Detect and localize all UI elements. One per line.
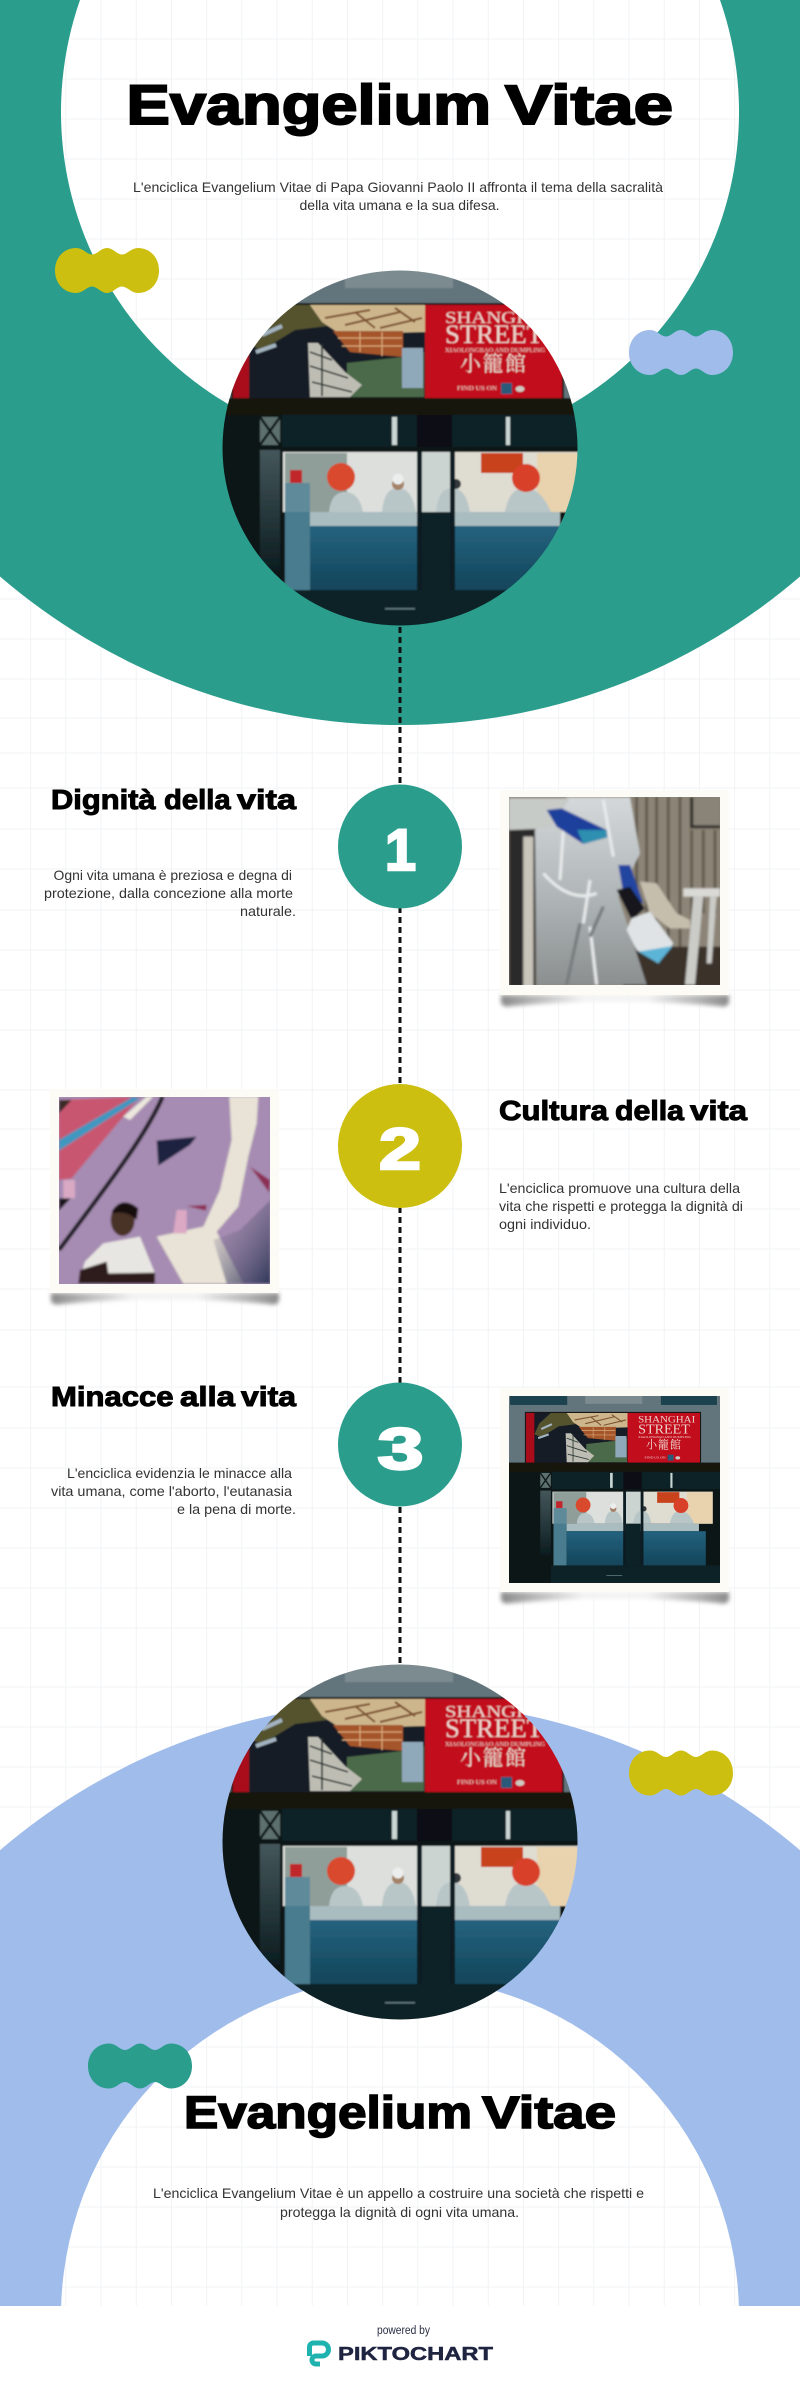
photo: top circle shop front: 小籠館	[460, 352, 526, 376]
closing title: Evangelium	[184, 2087, 472, 2138]
step 1	[44, 784, 729, 1007]
number circle 2	[338, 1084, 462, 1208]
number circle 2: 2	[379, 1117, 421, 1182]
photo frame: shop front: STREET	[638, 1421, 691, 1436]
photo frame: shop front: XIAOLONGBAO AND DUMPLING	[638, 1435, 692, 1439]
heading: Cultura della vita: Cultura	[499, 1095, 608, 1126]
heading: Dignità della vita: vita	[237, 784, 297, 815]
body text: step 1	[44, 867, 296, 919]
photo: bottom circle shop front: FIND US ON	[457, 1780, 498, 1786]
heading: Minacce alla vita: vita	[241, 1381, 296, 1412]
body text: step 3: e la pena di morte.	[177, 1501, 296, 1517]
photo frame: shop front: FIND US ON	[644, 1455, 666, 1459]
body text: step 3: vita umana, come l'aborto, l'eutanasia	[51, 1483, 292, 1499]
photo: bottom circle shop front: XIAOLONGBAO AND DUMPLING	[445, 1742, 546, 1748]
photo: top circle shop front: XIAOLONGBAO AND DUMPLING	[445, 348, 546, 354]
closing text: protegga la dignità di ogni vita umana.	[280, 2204, 519, 2220]
photo: bottom circle shop front: 小籠館	[460, 1746, 526, 1770]
blob: yellow bottom right	[629, 1750, 733, 1796]
body text: step 2	[499, 1180, 743, 1232]
body text: step 3	[51, 1465, 296, 1517]
body text: step 2: ogni individuo.	[499, 1216, 591, 1232]
heading: Dignità della vita: Dignità	[51, 784, 156, 815]
step 2	[50, 1084, 748, 1305]
panel: top teal ring	[0, 0, 800, 725]
heading: Cultura della vita: della	[615, 1095, 684, 1126]
title	[126, 73, 673, 136]
number circle 3: 3	[378, 1417, 424, 1482]
dotted timeline	[398, 627, 402, 1665]
closing text	[153, 2185, 644, 2220]
powered by label: powered by	[377, 2325, 430, 2337]
number circle 3	[338, 1382, 462, 1506]
body text: step 1: naturale.	[240, 903, 296, 919]
panel: bottom blue ring	[0, 1702, 800, 2306]
body text: step 2: L'enciclica promuove una cultura della	[499, 1180, 740, 1196]
body text: step 1: Ogni vita umana è preziosa e degna di	[54, 867, 292, 883]
intro text: L'enciclica Evangelium Vitae di Papa Giovanni Paolo II affronta il tema della sacralità	[133, 179, 663, 195]
photo frame: protective suit	[500, 790, 729, 1007]
heading: Cultura della vita	[499, 1095, 748, 1126]
Piktochart wordmark: PIKTOCHART	[338, 2343, 494, 2364]
footer: powered by Piktochart	[310, 2325, 494, 2364]
body text: step 2: vita che rispetti e protegga la dignità di	[499, 1198, 743, 1214]
body text: step 3: L'enciclica evidenzia le minacce alla	[67, 1465, 292, 1481]
photo: top circle shop front	[222, 270, 578, 626]
number circle 1	[338, 784, 462, 908]
icon: Piktochart logo	[310, 2343, 328, 2364]
photo: top circle shop front: STREET	[445, 320, 543, 349]
body text: step 1: protezione, dalla concezione alla morte	[44, 885, 293, 901]
blob: blue top right	[629, 330, 733, 375]
number circle 1: 1	[385, 818, 416, 883]
title: Evangelium	[126, 73, 491, 136]
blob: yellow top left	[55, 248, 159, 293]
closing text: L'enciclica Evangelium Vitae è un appello a costruire una società che rispetti e	[153, 2185, 644, 2201]
photo: bottom circle shop front	[222, 1664, 578, 2020]
photo: top circle shop front: FIND US ON	[457, 386, 498, 392]
blob: teal bottom left	[88, 2044, 192, 2088]
heading: Minacce alla vita	[51, 1381, 296, 1412]
photo frame: shop front: 小籠館	[646, 1437, 681, 1451]
photo: bottom circle shop front: STREET	[445, 1714, 543, 1743]
heading: Minacce alla vita: alla	[180, 1381, 236, 1412]
title: Vitae	[505, 73, 673, 136]
intro text: della vita umana e la sua difesa.	[300, 197, 500, 213]
photo frame: shop front: SHANGHAI	[638, 1415, 695, 1425]
photo: top circle shop front: SHANGHAI	[445, 308, 553, 327]
closing title	[184, 2087, 616, 2138]
photo frame: shop front	[500, 1388, 729, 1604]
heading: Minacce alla vita: Minacce	[51, 1381, 174, 1412]
closing title: Vitae	[482, 2087, 616, 2138]
heading: Dignità della vita	[51, 784, 297, 815]
heading: Cultura della vita: vita	[690, 1095, 748, 1126]
photo frame: mural and man	[50, 1089, 279, 1305]
intro text	[133, 179, 663, 213]
step 3	[51, 1381, 729, 1604]
photo: bottom circle shop front: SHANGHAI	[445, 1702, 553, 1721]
heading: Dignità della vita: della	[164, 784, 231, 815]
